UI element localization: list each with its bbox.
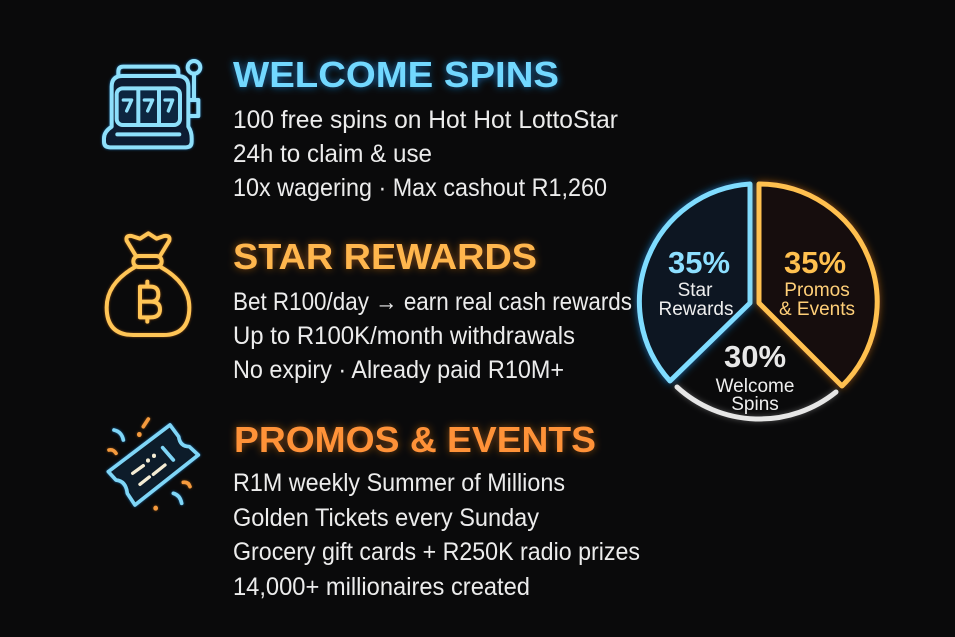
pie chart (639, 184, 877, 419)
text block: welcome spins details: 24h to claim & use (233, 140, 432, 168)
text block: welcome spins details: 10x wagering · Max cashout R1,260 (233, 174, 607, 202)
label: star rewards share: Rewards (659, 299, 733, 320)
label: star rewards share (659, 245, 733, 320)
slice: star rewards (639, 184, 750, 381)
text block: star rewards details: No expiry · Already paid R10M+ (233, 356, 564, 384)
text block: welcome spins details (233, 106, 618, 202)
text block: promos and events details: 14,000+ millionaires created (233, 573, 530, 601)
heading: promos and events: PROMOS & EVENTS (234, 419, 596, 460)
icon: slot machine (104, 61, 200, 147)
slice: promos and events (759, 184, 877, 386)
text block: welcome spins details: 100 free spins on Hot Hot LottoStar (233, 106, 618, 134)
label: welcome spins share: 30% (724, 339, 786, 374)
label: welcome spins share: Spins (731, 394, 779, 415)
icon: ticket with confetti (108, 419, 198, 508)
label: promos and events share: & Events (779, 299, 855, 320)
label: welcome spins share: Welcome (716, 376, 794, 397)
text block: promos and events details: Grocery gift cards + R250K radio prizes (233, 538, 640, 566)
heading: welcome spins: WELCOME SPINS (233, 54, 559, 95)
slice: welcome spins arc (677, 387, 836, 419)
icon: money bag (107, 233, 189, 335)
text block: star rewards details: Up to R100K/month withdrawals (233, 322, 575, 350)
label: star rewards share: 35% (668, 245, 730, 280)
text block: promos and events details: Golden Tickets every Sunday (233, 504, 539, 532)
text block: star rewards details: Bet R100/day → earn real cash rewards (233, 288, 632, 316)
label: star rewards share: Star (678, 280, 713, 301)
label: promos and events share: Promos (784, 280, 850, 301)
text block: promos and events details (233, 469, 640, 601)
text block: promos and events details: R1M weekly Summer of Millions (233, 469, 565, 497)
heading: star rewards: STAR REWARDS (233, 236, 537, 277)
label: promos and events share: 35% (784, 245, 846, 280)
text block: star rewards details (233, 288, 632, 384)
label: welcome spins share (716, 339, 794, 415)
label: promos and events share (779, 245, 855, 320)
